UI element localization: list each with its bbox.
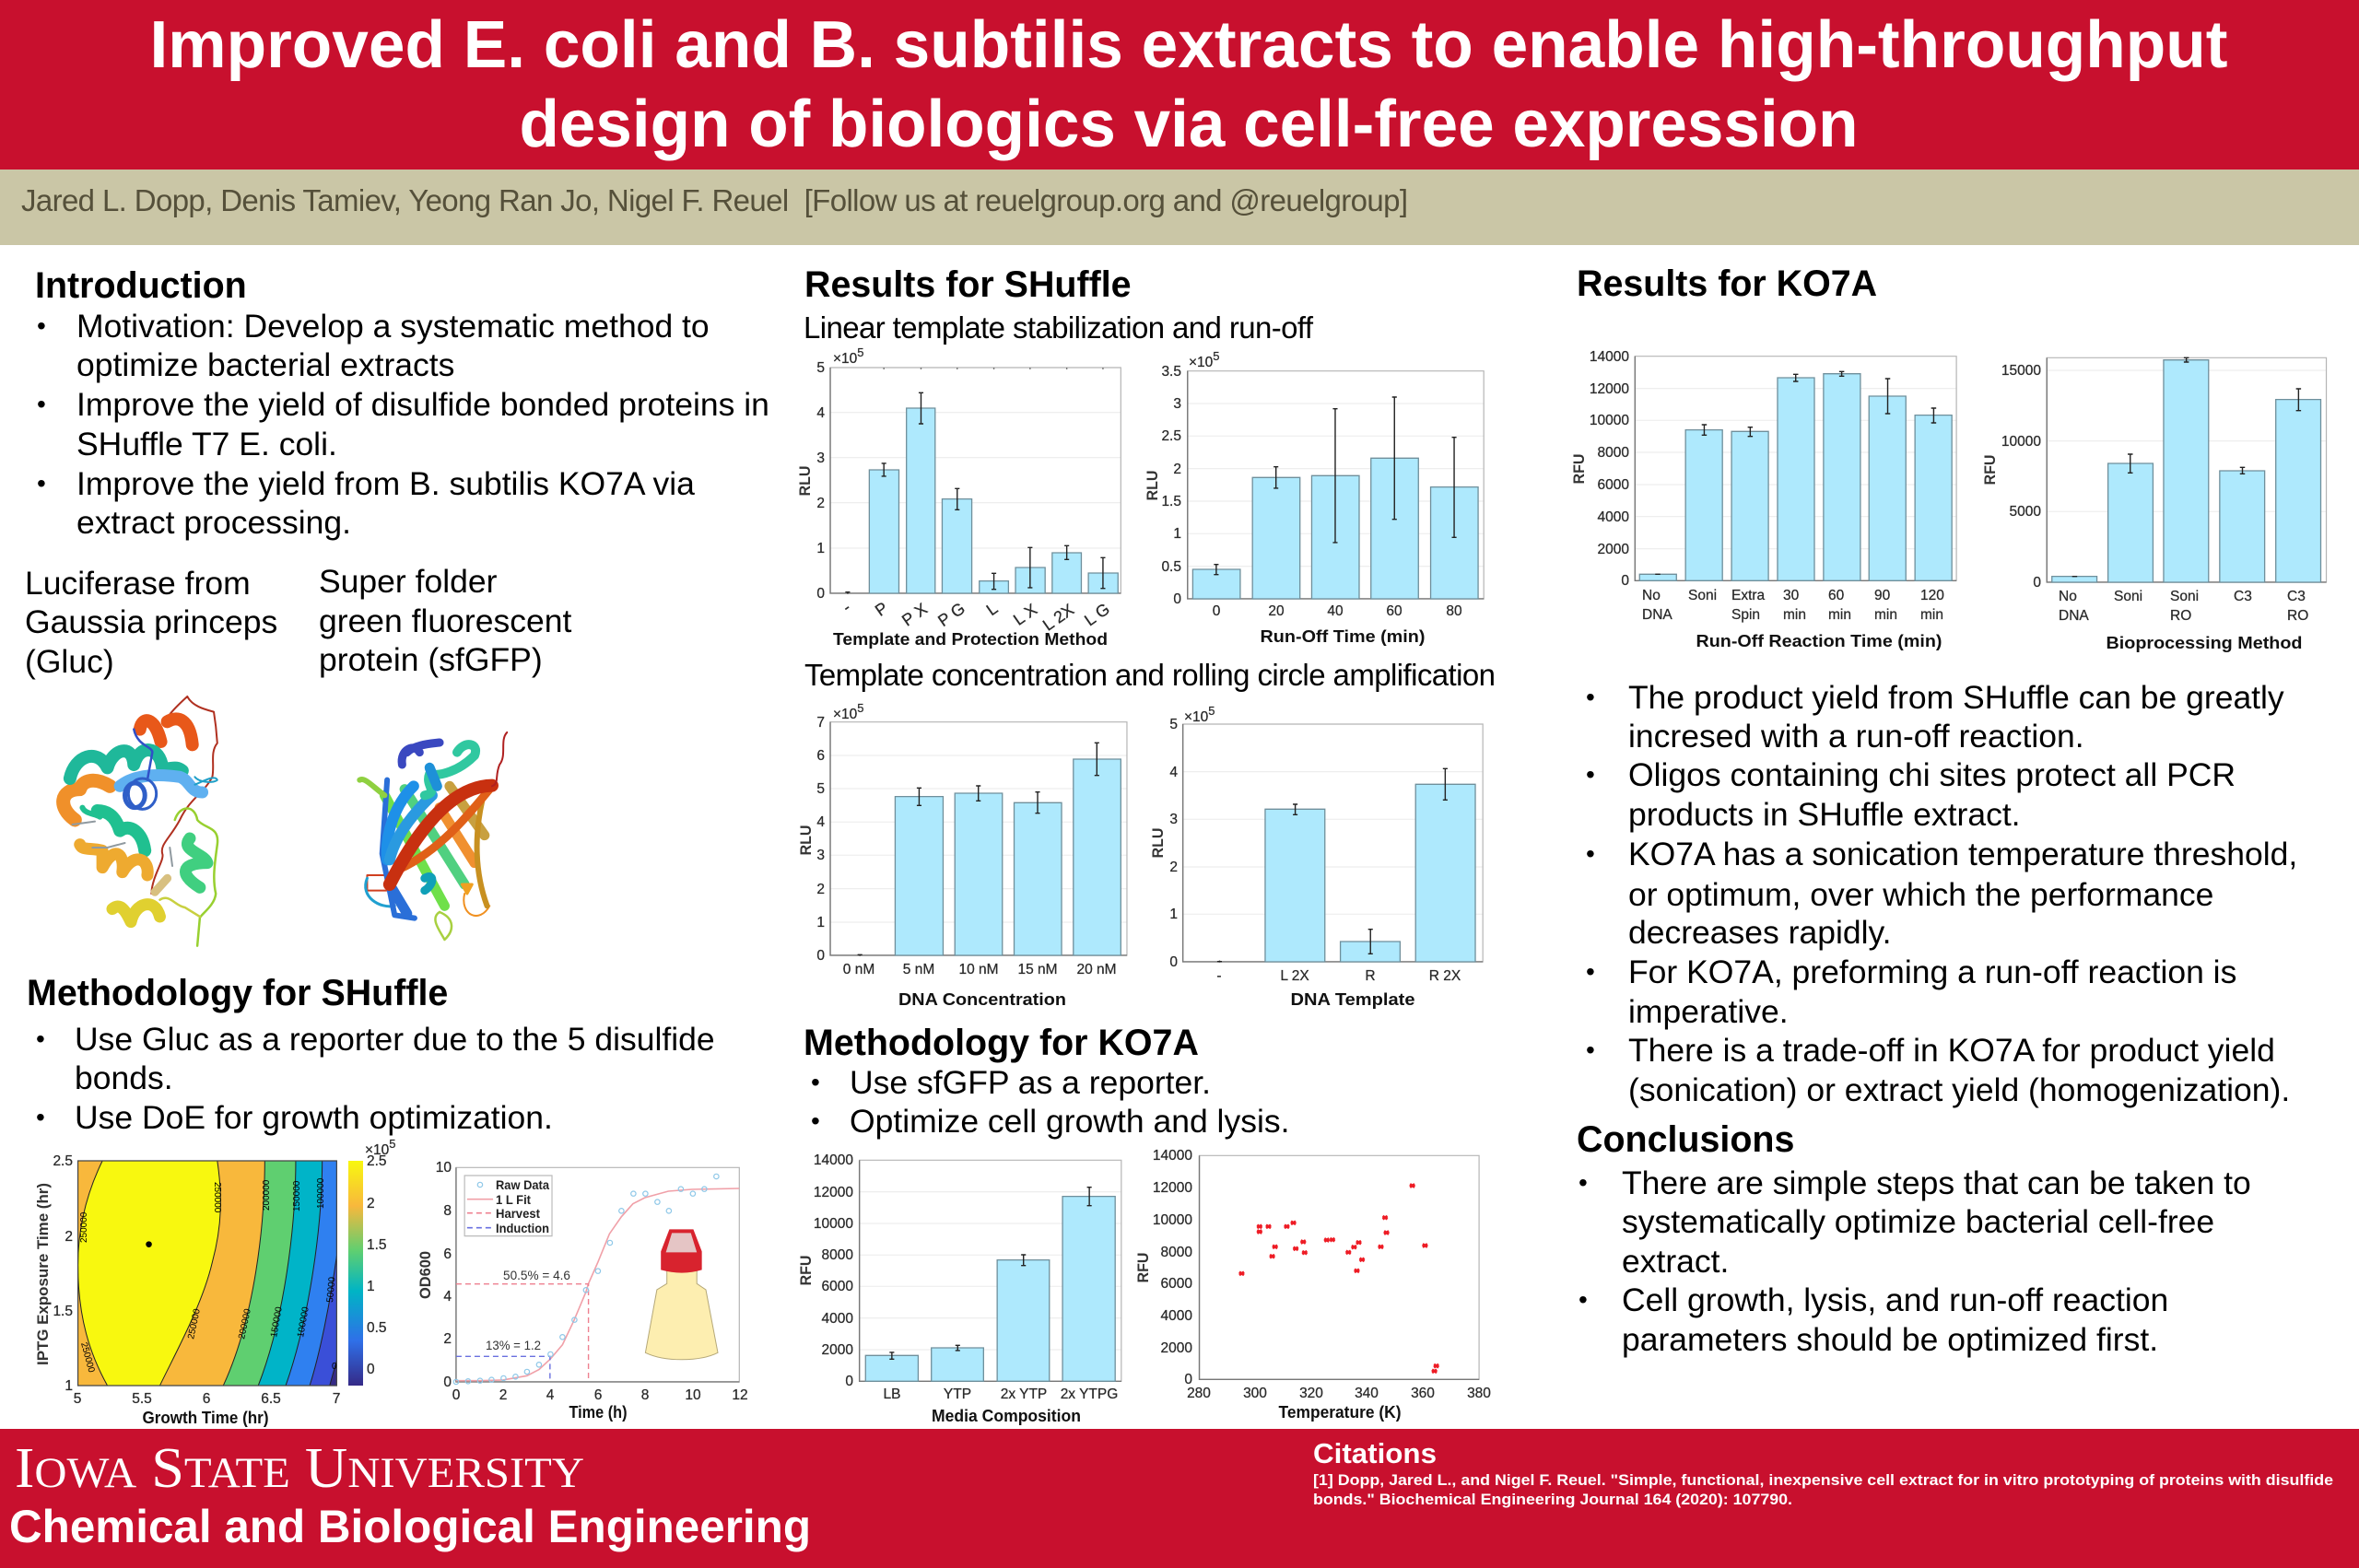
chart: template and protection method <box>796 345 1121 649</box>
axis text: L 2X <box>1280 968 1309 984</box>
axis text: ×10 <box>1189 355 1213 370</box>
axis text: 1 <box>816 541 825 556</box>
growth curve text: 4 <box>443 1289 452 1305</box>
axis text: 1 <box>816 915 825 930</box>
title: design of biologics via cell-free expression <box>520 88 1858 161</box>
axis text: DNA <box>2059 608 2089 624</box>
axis text <box>797 1153 1118 1425</box>
axis text <box>796 345 1113 649</box>
growth curve text: 8 <box>641 1387 649 1403</box>
axis labels: 5 <box>389 1137 396 1151</box>
text block: results bullets: Oligos containing chi sites protect all PCR <box>1628 756 2236 793</box>
heading: Conclusions: Conclusions <box>1577 1119 1794 1160</box>
text block: methodology KO7A bullets <box>811 1064 1289 1140</box>
axis text: 5 <box>816 781 825 797</box>
bars and axes <box>2047 357 2327 582</box>
axis text: 360 <box>1411 1386 1435 1401</box>
text block: results bullets: imperative. <box>1628 993 1789 1030</box>
chart: contour plot of growth time vs IPTG exposure <box>34 1137 396 1427</box>
growth curve text: 0 <box>452 1387 461 1403</box>
heading: Results for SHuffle: Results for SHuffle <box>804 264 1132 305</box>
axis text: 0.5 <box>1161 559 1181 575</box>
protein label: sfGFP: green fluorescent <box>319 603 571 639</box>
growth curve text: Time (h) <box>569 1403 628 1422</box>
protein label: Gluc: Luciferase from <box>25 565 251 602</box>
axis text: 0 <box>2033 575 2041 591</box>
axis labels: 0.5 <box>367 1320 387 1336</box>
text block: results bullets: • <box>1586 1036 1595 1064</box>
axis labels: 2 <box>367 1196 375 1211</box>
chart: run-off reaction time <box>1570 349 1956 650</box>
axis labels: 7 <box>333 1391 340 1407</box>
subheading: linear template: Linear template stabilization and run-off <box>804 310 1314 345</box>
axis text: 60 <box>1386 603 1402 619</box>
department name: Chemical and Biological Engineering <box>9 1501 811 1552</box>
axis labels: 5.5 <box>132 1391 152 1407</box>
axis text: RLU <box>797 825 815 855</box>
axis text: 0 <box>1621 573 1629 589</box>
axis text: RLU <box>1144 470 1161 501</box>
axis text: RLU <box>796 466 814 496</box>
contour labels: 250000 <box>79 1211 89 1243</box>
contour regions <box>78 1161 336 1386</box>
axis text: 340 <box>1355 1386 1379 1401</box>
axis text: 8000 <box>1598 445 1629 461</box>
colorbar <box>348 1161 363 1386</box>
citation text: [1] Dopp, Jared L., and Nigel F. Reuel. "Simple, functional, inexpensive cell extract for in vitro prototyping of proteins with disulfide <box>1313 1471 2333 1489</box>
text block: results bullets: (sonication) or extract yield (homogenization). <box>1628 1071 2290 1108</box>
text block: methodology SHuffle bullets: • <box>36 1024 45 1053</box>
contour labels: 150000 <box>292 1180 302 1211</box>
growth curve text: 10 <box>685 1387 701 1403</box>
text block: results bullets: There is a trade-off in KO7A for product yield <box>1628 1032 2275 1069</box>
axis text: 15000 <box>2001 363 2041 379</box>
text block: conclusions bullets: systematically optimize bacterial cell-free <box>1622 1203 2214 1240</box>
growth curve text: Induction <box>496 1221 549 1235</box>
axis text: 2x YTPG <box>1061 1387 1118 1402</box>
axis text: 3.5 <box>1161 364 1181 380</box>
icon: sfGFP protein structure <box>359 732 507 940</box>
text block: methodology SHuffle bullets: Use Gluc as a reporter due to the 5 disulfide <box>75 1021 715 1058</box>
chart: DNA concentration <box>797 701 1127 1009</box>
axis text: 14000 <box>1153 1148 1192 1164</box>
contour labels: 200000 <box>237 1307 253 1340</box>
heading: Methodology for KO7A: Methodology for KO7A <box>804 1023 1199 1063</box>
chart: temperature scatter <box>1134 1148 1491 1422</box>
axis text: 30 <box>1783 588 1800 603</box>
text block: results bullets: incresed with a run-off reaction. <box>1628 718 2084 755</box>
axis text: 5 <box>857 701 864 715</box>
axis text: ×10 <box>833 351 857 367</box>
axis text: No <box>2059 589 2077 604</box>
axis text: Soni <box>2170 589 2199 604</box>
text block: introduction bullets: • <box>37 390 46 418</box>
axis text: 6 <box>816 748 825 764</box>
text block: introduction bullets: Improve the yield of disulfide bonded proteins in <box>76 386 769 423</box>
axis text: 4000 <box>1598 509 1629 525</box>
text block: introduction bullets: • <box>37 469 46 497</box>
axis text: 380 <box>1467 1386 1491 1401</box>
axis text: 2 <box>816 882 825 897</box>
axis text: ×10 <box>833 707 857 722</box>
chart: bioprocessing method <box>1981 357 2327 652</box>
axis labels: 5 <box>74 1391 81 1407</box>
axis text: 20 <box>1268 603 1285 619</box>
heading: Introduction: Introduction <box>35 265 247 306</box>
axis text: 7 <box>816 715 825 731</box>
axis text: 0 <box>1169 954 1178 970</box>
axis text: RO <box>2170 608 2191 624</box>
citation text: bonds." Biochemical Engineering Journal 164 (2020): 107790. <box>1313 1491 1792 1508</box>
heading: Methodology for SHuffle: Methodology for SHuffle <box>27 973 448 1013</box>
authors: Jared L. Dopp, Denis Tamiev, Yeong Ran Jo, Nigel F. Reuel [Follow us at reuelgroup.org and @reuelgroup] <box>21 183 1408 217</box>
growth curve text: 2 <box>443 1331 452 1347</box>
axis text: 1 <box>1173 526 1181 542</box>
axis text: 2 <box>1169 860 1178 875</box>
axis text <box>1981 363 2308 652</box>
flask <box>645 1229 718 1360</box>
axis text: 0 <box>816 586 825 602</box>
axis text: LB <box>884 1387 900 1402</box>
footer band <box>0 1429 2359 1568</box>
protein label: sfGFP: Super folder <box>319 563 498 600</box>
growth curve text: 4 <box>546 1387 555 1403</box>
axis text: 2 <box>1173 462 1181 477</box>
axis text: YTP <box>944 1387 971 1402</box>
axis text: 320 <box>1299 1386 1323 1401</box>
axis text: RFU <box>1570 453 1588 485</box>
text block: results bullets: For KO7A, preforming a run-off reaction is <box>1628 954 2236 990</box>
text block: conclusions bullets: There are simple steps that can be taken to <box>1622 1164 2251 1201</box>
text block: methodology SHuffle bullets: bonds. <box>75 1059 173 1096</box>
axis text: 10000 <box>1153 1212 1192 1228</box>
text block: methodology KO7A bullets: Optimize cell growth and lysis. <box>850 1103 1289 1140</box>
axis text: 4 <box>816 814 825 830</box>
contour labels: 150000 <box>269 1305 285 1339</box>
axis text: 12000 <box>1153 1180 1192 1196</box>
axis text: min <box>1783 607 1806 623</box>
axis text: RFU <box>1981 455 1999 485</box>
growth curve text <box>417 1160 748 1422</box>
legend box <box>464 1176 552 1236</box>
axis text: 15 nM <box>1017 962 1058 977</box>
axis text: C3 <box>2287 589 2306 604</box>
axis text: 2000 <box>1598 542 1629 557</box>
axis text: 5 <box>816 360 825 376</box>
axis text: Spin <box>1731 607 1760 623</box>
axis text <box>1134 1148 1491 1422</box>
axis text: L G <box>1081 600 1113 629</box>
growth curve text: 2 <box>499 1387 507 1403</box>
heading: Results for KO7A: Results for KO7A <box>1577 263 1877 304</box>
text block: results bullets: The product yield from SHuffle can be greatly <box>1628 679 2284 716</box>
protein label: sfGFP: protein (sfGFP) <box>319 641 543 678</box>
text block: introduction bullets: Improve the yield from B. subtilis KO7A via <box>76 465 695 502</box>
axis text: 1.5 <box>1161 494 1181 509</box>
text block: results bullets: decreases rapidly. <box>1628 914 1891 951</box>
axis text: No <box>1642 588 1661 603</box>
axis text: 14000 <box>814 1153 853 1168</box>
contour labels: 50000 <box>325 1276 337 1303</box>
growth curve text: 13% = 1.2 <box>486 1338 541 1352</box>
axis text: - <box>1216 968 1222 984</box>
axis labels: Growth Time (hr) <box>142 1409 269 1427</box>
axis text: 2 <box>816 496 825 511</box>
chart: growth curve OD600 <box>417 1160 748 1422</box>
protein label: Gluc <box>25 565 277 680</box>
contour labels: 200000 <box>262 1179 272 1211</box>
axis text: Template and Protection Method <box>833 630 1108 649</box>
contour labels: 250000 <box>212 1182 222 1213</box>
axes <box>453 1167 739 1385</box>
contour labels: 250000 <box>78 1341 96 1374</box>
axis labels <box>34 1137 396 1427</box>
points and axes <box>1200 1155 1479 1379</box>
axis text: 12000 <box>814 1185 853 1200</box>
contour labels <box>78 1177 337 1374</box>
axis text: 10000 <box>2001 434 2041 450</box>
axis text: 5 <box>1208 704 1215 718</box>
axis text: 4000 <box>1161 1308 1192 1324</box>
axis text: 1 <box>1169 907 1178 922</box>
bars and axes <box>1188 371 1484 599</box>
text block: results bullets: • <box>1586 839 1595 868</box>
growth curve text: 8 <box>443 1203 452 1219</box>
chart: DNA template <box>1149 704 1483 1009</box>
raw data <box>453 1174 719 1385</box>
text block: methodology SHuffle bullets <box>36 1021 715 1136</box>
axis text: P <box>872 598 891 620</box>
axis text: 3 <box>816 848 825 863</box>
axis labels: 1 <box>367 1279 375 1294</box>
text block: introduction bullets <box>37 308 769 541</box>
axis text: 4000 <box>822 1311 853 1327</box>
growth curve text: 12 <box>732 1387 748 1403</box>
axis text: 80 <box>1446 603 1462 619</box>
axis text: RFU <box>1134 1253 1152 1282</box>
axis text: 6000 <box>1161 1276 1192 1292</box>
text block: conclusions bullets: extract. <box>1622 1243 1729 1280</box>
growth curve text: 50.5% = 4.6 <box>503 1268 570 1282</box>
axis text: 40 <box>1327 603 1344 619</box>
axis text: 10000 <box>814 1216 853 1232</box>
text block: conclusions bullets: parameters should be optimized first. <box>1622 1321 2158 1358</box>
growth curve text: 0 <box>443 1375 452 1390</box>
chart: media composition <box>797 1153 1121 1425</box>
chart: run-off time <box>1144 349 1484 646</box>
fit curve <box>456 1188 739 1381</box>
growth curve text: 6 <box>443 1246 452 1262</box>
axis text <box>797 701 1117 1009</box>
icon: Gluc protein structure <box>64 696 217 946</box>
axis text: 2.5 <box>1161 428 1181 444</box>
text block: conclusions bullets: • <box>1579 1168 1588 1197</box>
axis text: P G <box>934 599 968 630</box>
growth curve text: 1 L Fit <box>496 1192 531 1207</box>
citation text <box>1313 1471 2333 1508</box>
axis text: Bioprocessing Method <box>2107 634 2302 652</box>
contour labels: 100000 <box>316 1177 326 1209</box>
growth curve text: 6 <box>594 1387 602 1403</box>
text block: results bullets: • <box>1586 760 1595 789</box>
axis text: - <box>839 598 854 616</box>
contour labels: 0 <box>332 1362 337 1372</box>
axis text: L 2X <box>1039 600 1077 635</box>
protein label: Gluc: (Gluc) <box>25 643 114 680</box>
title <box>149 8 2228 161</box>
text block: results bullets: KO7A has a sonication temperature threshold, <box>1628 836 2297 872</box>
axis labels: 2.5 <box>367 1153 387 1169</box>
axis text: 0 <box>1184 1372 1192 1387</box>
text block: results bullets: • <box>1586 957 1595 986</box>
axis labels: 0 <box>367 1362 375 1377</box>
axis text: 6000 <box>1598 477 1629 493</box>
axis text: RLU <box>1149 827 1167 859</box>
contour labels: 100000 <box>296 1305 311 1339</box>
axis text: DNA <box>1642 607 1672 623</box>
axis labels: 6.5 <box>261 1391 281 1407</box>
text block: methodology KO7A bullets: Use sfGFP as a reporter. <box>850 1064 1211 1101</box>
text block: conclusions bullets: Cell growth, lysis, and run-off reaction <box>1622 1281 2168 1318</box>
axis labels: 2 <box>65 1229 73 1245</box>
axis text: 4 <box>1169 765 1178 780</box>
text block: introduction bullets: Motivation: Develop a systematic method to <box>76 308 710 345</box>
axis text: min <box>1828 607 1851 623</box>
text block: conclusions bullets <box>1579 1164 2251 1358</box>
axis text: Soni <box>2114 589 2142 604</box>
text block: introduction bullets: optimize bacterial extracts <box>76 346 454 383</box>
axis text: 120 <box>1920 588 1944 603</box>
axis text: 20 nM <box>1076 962 1117 977</box>
axis text: 5 <box>857 345 864 359</box>
axis text: min <box>1874 607 1897 623</box>
contour labels: 250000 <box>186 1307 203 1340</box>
axis text: 0 <box>1173 591 1181 607</box>
text block: results bullets <box>1586 679 2297 1108</box>
axis text: RO <box>2287 608 2308 624</box>
bars and axes <box>830 368 1121 594</box>
axis text: 5000 <box>2010 504 2041 520</box>
axis text: 2000 <box>1161 1340 1192 1356</box>
axis text: 4 <box>816 405 825 421</box>
text block: conclusions bullets: • <box>1579 1285 1588 1314</box>
axis text: 0 nM <box>843 962 874 977</box>
axis text: 0 <box>845 1374 853 1389</box>
axis text: 300 <box>1243 1386 1267 1401</box>
axis text: 60 <box>1828 588 1845 603</box>
axis text: P X <box>898 600 931 630</box>
citations heading: Citations <box>1313 1437 1437 1469</box>
growth curve text: Harvest <box>496 1206 540 1221</box>
text block: introduction bullets: extract processing. <box>76 504 351 541</box>
axis text: DNA Template <box>1290 990 1415 1009</box>
header band <box>0 0 2359 170</box>
text block: methodology KO7A bullets: • <box>811 1068 820 1096</box>
protein label: Gluc: Gaussia princeps <box>25 603 277 640</box>
axis text: ×10 <box>1184 709 1208 725</box>
growth curve text: OD600 <box>417 1251 434 1299</box>
axis text: 280 <box>1187 1386 1211 1401</box>
axis text: 14000 <box>1590 349 1629 365</box>
axis text: R 2X <box>1429 968 1461 984</box>
axis text: 3 <box>1173 396 1181 412</box>
axis text <box>1570 349 1944 650</box>
axis labels: 6 <box>203 1391 210 1407</box>
axis text: 90 <box>1874 588 1891 603</box>
text block: methodology SHuffle bullets: Use DoE for growth optimization. <box>75 1099 553 1136</box>
axis text: 8000 <box>1161 1245 1192 1260</box>
axis text: 3 <box>1169 812 1178 827</box>
axis labels: 1 <box>65 1378 73 1394</box>
axis text: Run-Off Reaction Time (min) <box>1696 632 1942 650</box>
text block: introduction bullets: SHuffle T7 E. coli. <box>76 426 337 462</box>
text block: methodology KO7A bullets: • <box>811 1106 820 1135</box>
bars and axes <box>1635 357 1956 580</box>
axis text: Run-Off Time (min) <box>1261 627 1425 646</box>
text block: methodology SHuffle bullets: • <box>36 1103 45 1131</box>
axis text: Extra <box>1731 588 1766 603</box>
growth curve text: Raw Data <box>496 1177 549 1192</box>
bars and axes <box>830 722 1127 956</box>
axis text: 5 nM <box>903 962 934 977</box>
axis text: C3 <box>2234 589 2252 604</box>
axis text: 2000 <box>822 1342 853 1358</box>
axis text: 3 <box>816 451 825 466</box>
axis text: L <box>983 599 1001 619</box>
growth curve text: 10 <box>436 1160 452 1176</box>
bars and axes <box>860 1160 1121 1381</box>
axis text <box>1149 704 1461 1009</box>
axis text: DNA Concentration <box>898 990 1066 1009</box>
axis labels: ×10 <box>365 1142 389 1158</box>
text block: results bullets: products in SHuffle extract. <box>1628 796 2021 833</box>
text block: introduction bullets: • <box>37 311 46 340</box>
logo wordmark: IOWA STATE UNIVERSITY <box>15 1437 584 1500</box>
axis text: min <box>1920 607 1943 623</box>
axis text: 0 <box>1213 603 1221 619</box>
axis labels: 2.5 <box>53 1153 73 1169</box>
text block: results bullets: • <box>1586 683 1595 711</box>
author band <box>0 170 2359 245</box>
axis text: 6000 <box>822 1279 853 1294</box>
subheading: template concentration: Template concentration and rolling circle amplification <box>804 658 1496 692</box>
axis text: Soni <box>1688 588 1717 603</box>
axis text: 5 <box>1213 349 1220 363</box>
axis text: L X <box>1010 600 1040 629</box>
axis text: 2x YTP <box>1001 1387 1047 1402</box>
protein label: sfGFP <box>319 563 571 678</box>
axis text <box>1144 349 1462 646</box>
bars and axes <box>1183 724 1483 963</box>
axis text: 0 <box>816 948 825 964</box>
axis text: R <box>1365 968 1376 984</box>
axis labels: 1.5 <box>53 1304 73 1319</box>
axis text: Temperature (K) <box>1279 1403 1401 1422</box>
axis text: 10000 <box>1590 413 1629 428</box>
axis labels: IPTG Exposure Time (hr) <box>34 1183 52 1365</box>
axis text: 12000 <box>1590 381 1629 397</box>
axis text: 10 nM <box>958 962 999 977</box>
axis text: RFU <box>797 1255 815 1286</box>
axis text: Media Composition <box>932 1407 1081 1425</box>
axis labels: 1.5 <box>367 1237 387 1253</box>
harvest and induction markers <box>456 1284 589 1382</box>
axis text: 5 <box>1169 717 1178 732</box>
title: Improved E. coli and B. subtilis extracts to enable high-throughput <box>149 8 2228 82</box>
text block: results bullets: or optimum, over which the performance <box>1628 876 2213 913</box>
axis text: 8000 <box>822 1247 853 1263</box>
